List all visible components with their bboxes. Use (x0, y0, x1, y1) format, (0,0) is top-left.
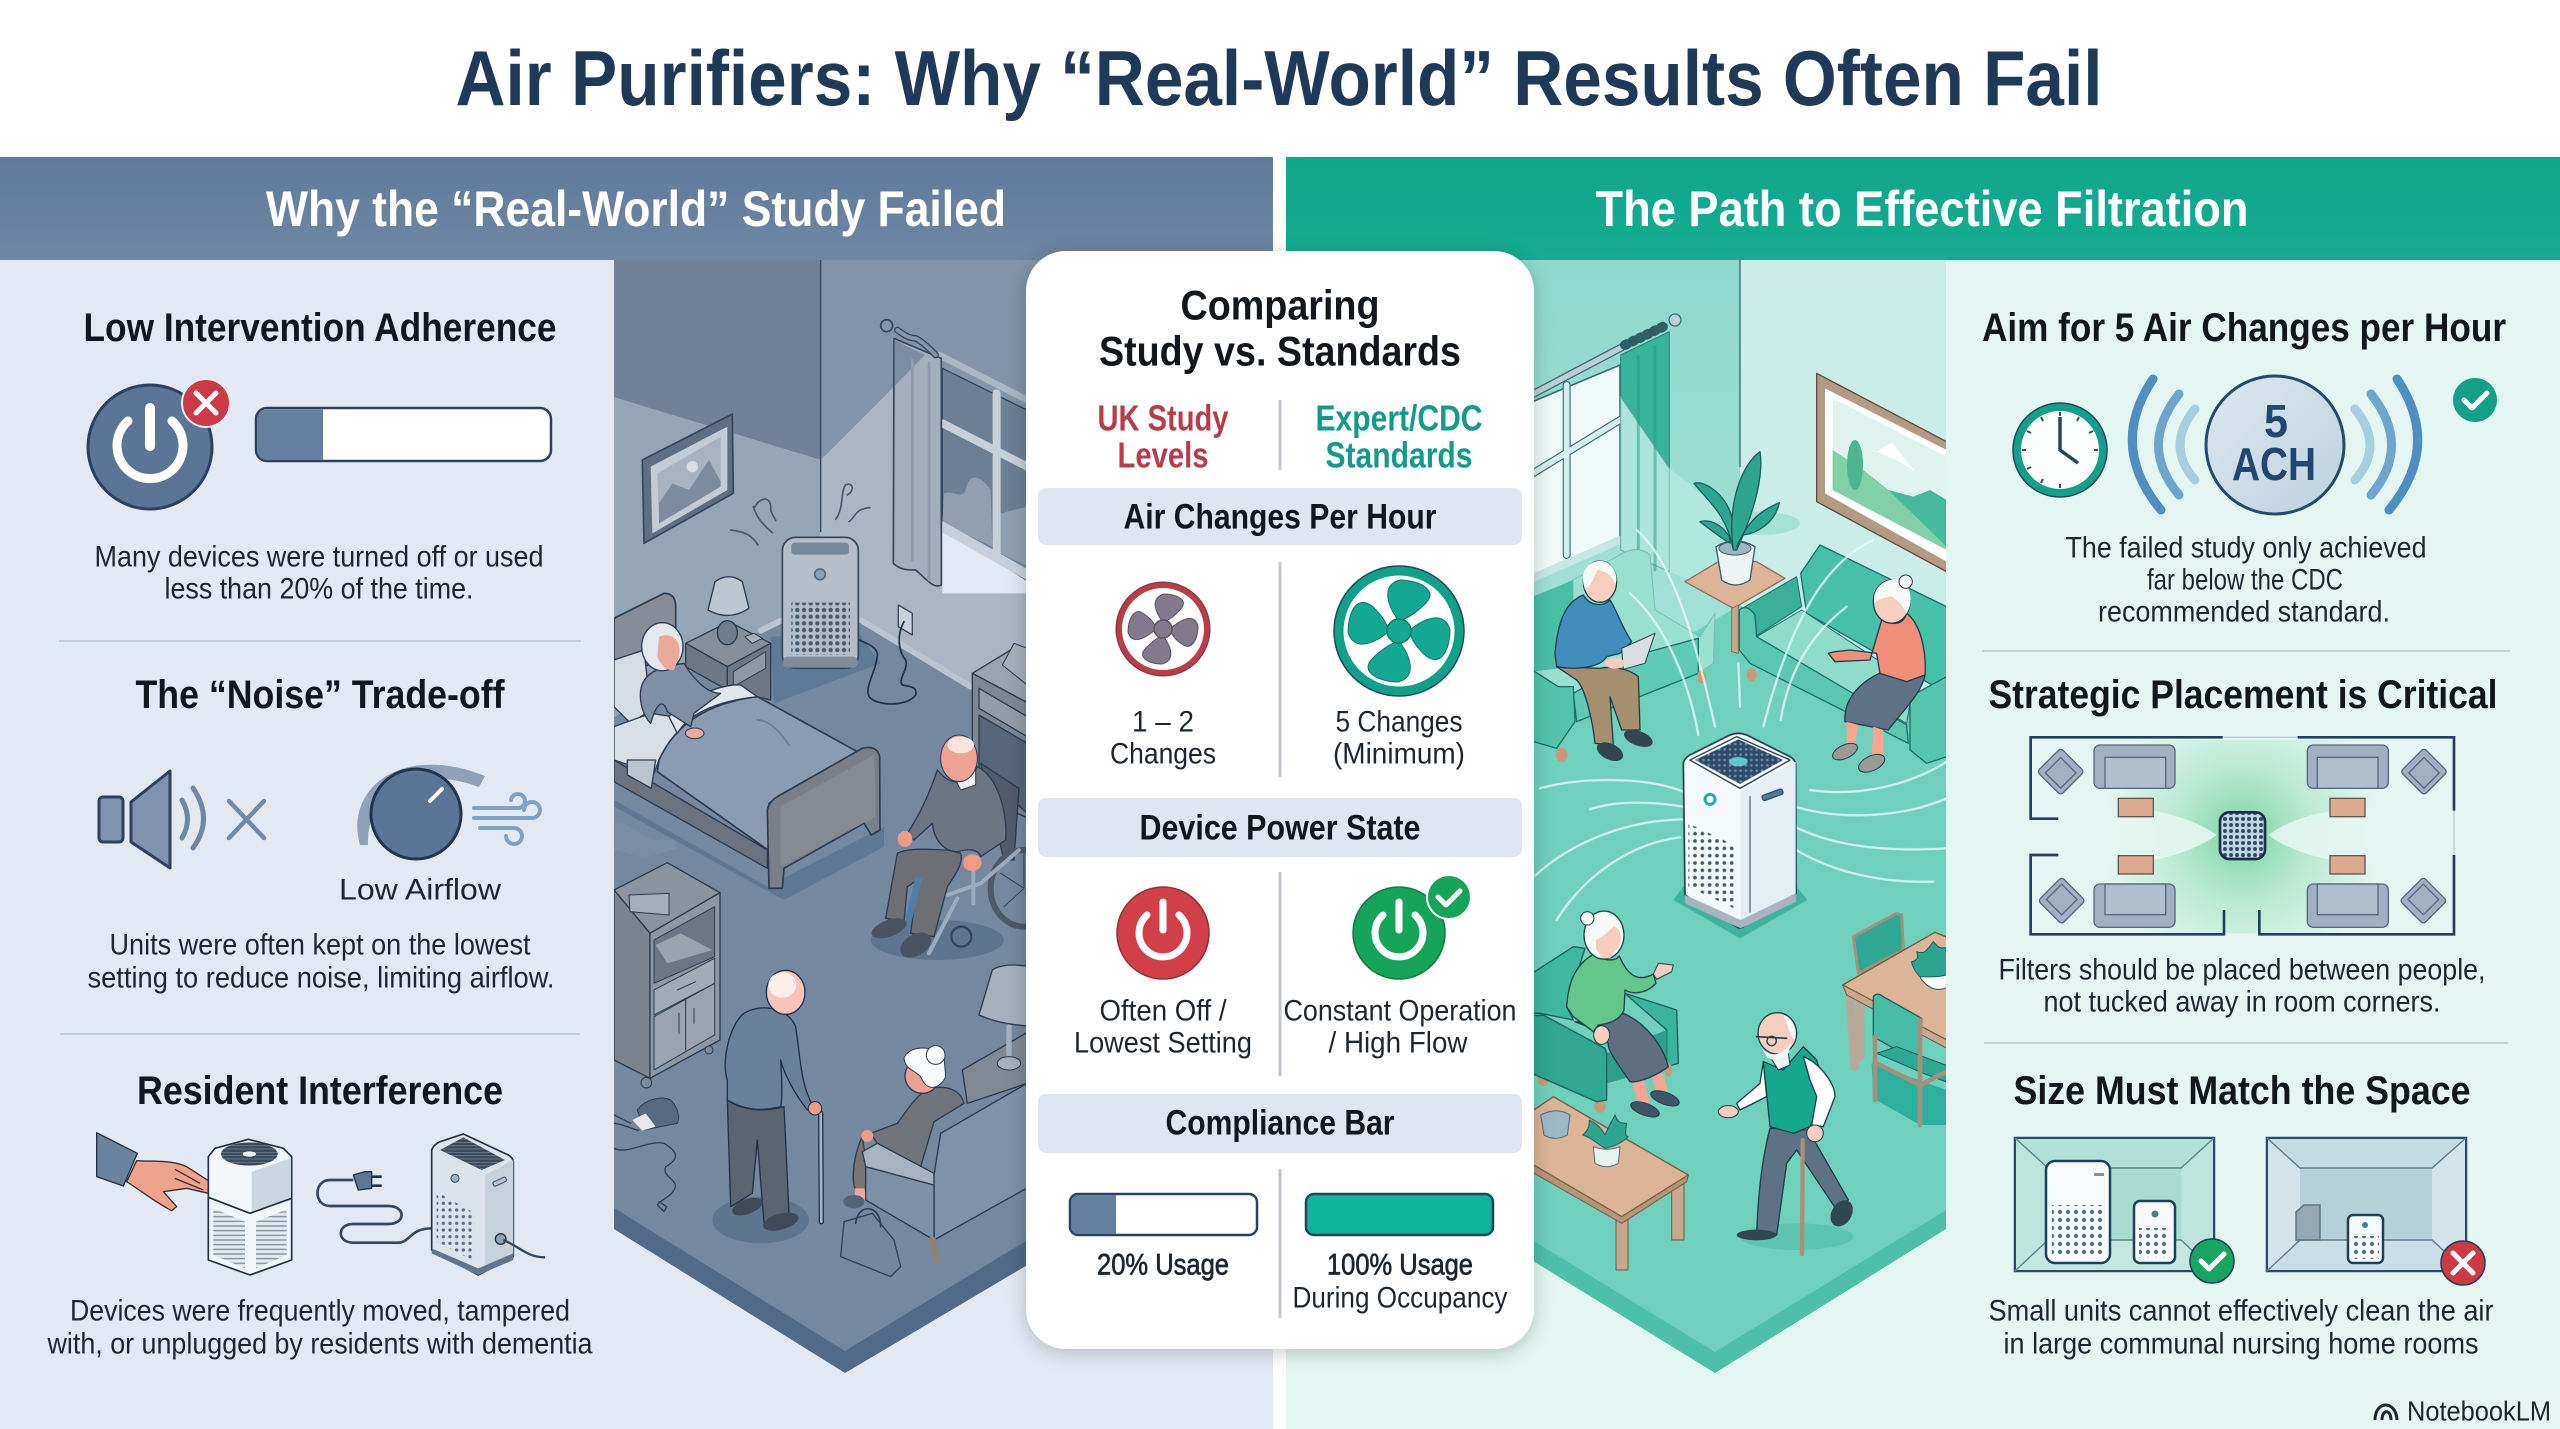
dining table and chairs (1843, 913, 1950, 1125)
purifier unit (782, 537, 858, 668)
label: 1-2 changes: Changes (1110, 738, 1216, 770)
description (2066, 532, 2426, 628)
heading: Low Intervention Adherence (84, 306, 556, 350)
section: resident interference (47, 1069, 593, 1360)
description: recommended standard. (2098, 596, 2390, 628)
label: constant operation: / High Flow (1328, 1026, 1468, 1060)
heading: Resident Interference (137, 1069, 503, 1113)
label: 1-2 changes: 1 – 2 (1132, 706, 1194, 738)
heading: Size Must Match the Space (2014, 1069, 2470, 1113)
seated woman in green (1534, 910, 1680, 1118)
card title (1099, 282, 1461, 374)
walking resident with cane (712, 970, 822, 1243)
outlet and cord (859, 605, 916, 704)
row header: device power (1038, 798, 1522, 857)
section: size must match (1988, 1069, 2494, 1360)
column heading: UK study: UK Study (1098, 398, 1228, 438)
section: noise trade-off (88, 673, 554, 994)
icon: 5 ACH badge with waves (2132, 376, 2418, 514)
icon: muted speaker (99, 771, 264, 868)
icon: low airflow dial (339, 765, 540, 906)
description (47, 1294, 593, 1360)
icon: 5 ACH badge with waves: ACH (2232, 438, 2316, 490)
seated resident on sofa with lamp (843, 965, 1047, 1260)
icon: check badge (2453, 378, 2497, 422)
left sofa with blue resident (1517, 550, 1715, 765)
right header bar: The Path to Effective Filtration (1596, 181, 2248, 237)
window (938, 352, 1026, 580)
center comparison card (1026, 251, 1534, 1353)
column heading: UK study: Levels (1118, 434, 1208, 476)
bed with resident (614, 593, 884, 900)
right header bar (1286, 157, 2560, 260)
icon: 5 ACH badge with waves: 5 (2264, 395, 2288, 447)
description: Devices were frequently moved, tampered (70, 1294, 570, 1328)
description: setting to reduce noise, limiting airflow. (88, 962, 554, 994)
coffee table (1517, 1097, 1688, 1270)
label: 5 changes: 5 Changes (1336, 706, 1462, 738)
panel: path to effective filtration (1286, 157, 2560, 1429)
window (1534, 364, 1620, 582)
left header bar: Why the “Real-World” Study Failed (266, 181, 1006, 237)
row header: compliance bar: Compliance Bar (1166, 1104, 1395, 1142)
row header: air changes: Air Changes Per Hour (1124, 498, 1437, 536)
section: aim for 5 ACH (1982, 306, 2506, 628)
description: Units were often kept on the lowest (110, 928, 531, 962)
label: 5 changes (1333, 706, 1465, 770)
icon: unplugged purifier (317, 1134, 545, 1275)
compliance bar: 20 percent (1070, 1194, 1257, 1282)
card title: Comparing (1180, 282, 1380, 328)
diagram: correctly sized room (2015, 1138, 2234, 1283)
panel: why the study failed (0, 157, 1273, 1429)
icon: power off (88, 379, 230, 509)
heading: The “Noise” Trade-off (136, 673, 505, 717)
icons: tampering and unplugging (97, 1133, 545, 1275)
description (1988, 1294, 2494, 1360)
wall picture (642, 414, 733, 543)
description: not tucked away in room corners. (2044, 986, 2440, 1018)
odor wisps (731, 484, 870, 545)
description: Many devices were turned off or used (94, 540, 544, 574)
wall picture (1817, 373, 1947, 572)
label: 5 changes: (Minimum) (1333, 738, 1465, 770)
card title: Study vs. Standards (1099, 328, 1461, 374)
nightstand and lamp (686, 577, 771, 700)
walls and floor (1519, 260, 1946, 1373)
row header: device power: Device Power State (1140, 808, 1420, 848)
description (88, 928, 554, 994)
floor clutter (614, 1098, 680, 1212)
title: Air Purifiers: Why “Real-World” Results Often Fail (456, 34, 2102, 122)
description: The failed study only achieved (2066, 532, 2426, 564)
section: strategic placement (1988, 673, 2498, 1018)
walking man with cane (1718, 1013, 1857, 1254)
compliance bar: 100 percent (1292, 1194, 1508, 1314)
description: in large communal nursing home rooms (2004, 1328, 2478, 1360)
label: constant operation: Constant Operation (1284, 994, 1516, 1028)
label: often off: Often Off / (1100, 994, 1227, 1028)
icon: red power (1117, 887, 1209, 979)
compliance bar: 100 percent: 100% Usage (1327, 1248, 1473, 1282)
floor plan diagram (2031, 737, 2454, 934)
label: 1-2 changes (1110, 706, 1216, 770)
column heading: expert standards: Expert/CDC (1316, 398, 1482, 438)
row header: compliance bar (1038, 1094, 1522, 1153)
walls and floor (614, 260, 1041, 1373)
label: constant operation (1284, 994, 1516, 1060)
icon: hand touching purifier (97, 1133, 292, 1275)
description: with, or unplugged by residents with dementia (47, 1328, 593, 1360)
label: often off (1074, 994, 1252, 1060)
compliance bar: 20 percent: 20% Usage (1097, 1248, 1229, 1282)
icon: weak fan (1116, 582, 1210, 676)
description (94, 540, 544, 606)
icon: strong fan (1334, 566, 1464, 696)
description: Filters should be placed between people, (1998, 954, 2486, 986)
diagram: undersized unit room (2267, 1138, 2485, 1285)
curtain and rod (1517, 314, 1743, 603)
side dresser (972, 642, 1026, 818)
usage bar (256, 408, 551, 461)
description (1998, 954, 2486, 1018)
air purifier (1673, 733, 1807, 938)
air flow lines (1534, 530, 1947, 920)
row header: air changes (1038, 488, 1522, 545)
label: often off: Lowest Setting (1074, 1026, 1252, 1060)
side cabinet (614, 863, 720, 1088)
illustration: effective filtration room (1460, 260, 1950, 1427)
description: far below the CDC (2147, 564, 2343, 596)
compliance bar: 100 percent: During Occupancy (1292, 1282, 1508, 1314)
side table with plant (1685, 452, 1800, 653)
handbag on floor (841, 1209, 901, 1277)
icon: low airflow dial: Low Airflow (339, 874, 501, 906)
left header bar (0, 157, 1273, 260)
right sofa with salmon resident (1739, 545, 1947, 776)
column heading: UK study (1098, 398, 1228, 476)
curtain and rod (881, 320, 941, 586)
column heading: expert standards: Standards (1326, 434, 1472, 476)
icon: clock (2013, 403, 2107, 497)
description: Small units cannot effectively clean the air (1988, 1294, 2494, 1328)
resident in wheelchair (870, 734, 1026, 960)
baseboards (761, 620, 971, 687)
section: low intervention adherence (84, 306, 556, 606)
description: less than 20% of the time. (164, 572, 474, 606)
heading: Strategic Placement is Critical (1988, 673, 2498, 717)
illustration: failed nursing home room (614, 260, 1041, 1373)
column heading: expert standards (1316, 398, 1482, 476)
icon: green power with check (1353, 875, 1471, 979)
